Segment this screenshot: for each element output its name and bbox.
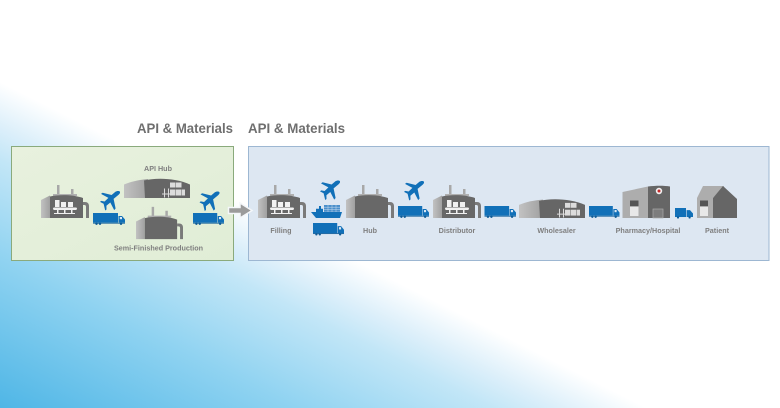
heading: left: API & Materials	[137, 120, 233, 136]
label: Pharmacy/Hospital: Pharmacy/Hospital	[616, 226, 680, 235]
icon: van	[675, 208, 693, 219]
icon: distributor factory	[433, 185, 481, 218]
icon: truck 1	[93, 213, 125, 225]
icon: pharmacy hospital	[622, 186, 670, 218]
icon: plane 1	[100, 191, 120, 210]
icon: wholesaler warehouse	[519, 199, 585, 218]
icon: source factory	[41, 185, 89, 218]
heading: right: API & Materials	[248, 120, 345, 136]
icon: API hub warehouse	[124, 179, 190, 198]
icon: truck	[398, 206, 429, 218]
panel: distribution chain	[248, 146, 769, 260]
label: Distributor: Distributor	[439, 226, 476, 235]
icon: patient house	[697, 186, 737, 218]
label: Semi-Finished Production: Semi-Finished Production	[114, 244, 203, 252]
icon: ship	[311, 205, 342, 218]
label: Wholesaler: Wholesaler	[537, 226, 576, 235]
icon: truck	[313, 223, 344, 236]
icon: plane	[404, 181, 424, 200]
label: API Hub: API Hub	[144, 164, 173, 173]
icon: truck	[484, 206, 516, 218]
icon: semi-finished factory	[136, 207, 183, 239]
label: Patient: Patient	[705, 226, 730, 235]
icon: truck	[589, 206, 620, 218]
label: Hub: Hub	[363, 226, 378, 235]
arrow between panels	[228, 203, 252, 218]
icon: hub factory	[346, 185, 394, 218]
icon: plane 2	[200, 191, 220, 211]
icon: filling factory	[258, 185, 306, 218]
icon: truck 2	[193, 213, 224, 225]
icon: plane	[320, 180, 340, 200]
label: Filling: Filling	[270, 226, 292, 235]
panel: API and semi-finished production	[12, 146, 234, 260]
